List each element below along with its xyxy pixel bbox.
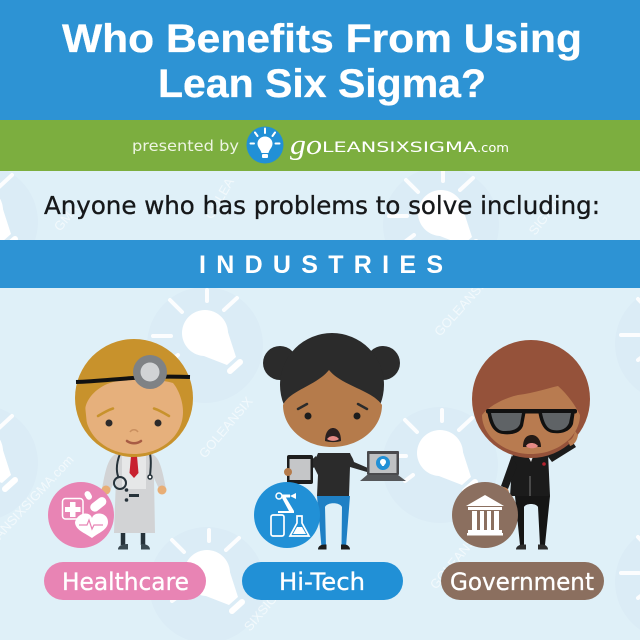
title: Lean Six Sigma? — [158, 62, 486, 106]
presented by bar — [0, 120, 640, 171]
presented by text: presented by — [132, 137, 239, 155]
character: woman with tablet and laptop — [263, 333, 406, 550]
section band: industries — [0, 240, 640, 288]
panel: healthcare — [44, 339, 206, 600]
background pattern: light bulbs: GOLEANSIX — [196, 393, 256, 461]
panel: government — [441, 340, 604, 600]
background pattern: light bulbs: GMA — [51, 201, 82, 234]
logo wordmark: .com — [477, 140, 509, 155]
logo wordmark: LEANSIXSIGMA — [322, 140, 477, 156]
background pattern: light bulbs: GOLEANSIX — [431, 273, 493, 339]
background pattern: light bulbs — [0, 164, 640, 640]
label: hi-tech: Hi-Tech — [279, 568, 365, 596]
label: healthcare — [44, 562, 206, 600]
label: hi-tech — [242, 562, 403, 600]
icon: hi-tech badge — [254, 482, 320, 548]
sunglasses — [486, 409, 577, 434]
background pattern: light bulbs: SIXSIGMA — [241, 576, 293, 634]
icon: government building badge — [452, 482, 518, 548]
intro text: Anyone who has problems to solve including: — [44, 191, 600, 220]
label: government: Government — [450, 568, 594, 596]
icon: healthcare badge — [48, 482, 114, 548]
section heading: INDUSTRIES — [199, 251, 443, 279]
background pattern: light bulbs: GOLEANSIX — [427, 524, 487, 592]
title — [62, 17, 582, 106]
logo wordmark — [290, 129, 509, 161]
panel: hi-tech — [242, 333, 406, 600]
background pattern: light bulbs: GOLEA — [202, 175, 237, 222]
icon: logo light bulb — [246, 126, 284, 164]
background pattern: light bulbs: SIGMA — [526, 195, 563, 238]
character: man in suit with sunglasses — [472, 340, 590, 550]
character: doctor — [75, 339, 193, 550]
title: Who Benefits From Using — [62, 17, 582, 61]
logo wordmark: go — [290, 129, 322, 161]
title banner — [0, 0, 640, 120]
label: government — [441, 562, 604, 600]
label: healthcare: Healthcare — [62, 568, 189, 596]
